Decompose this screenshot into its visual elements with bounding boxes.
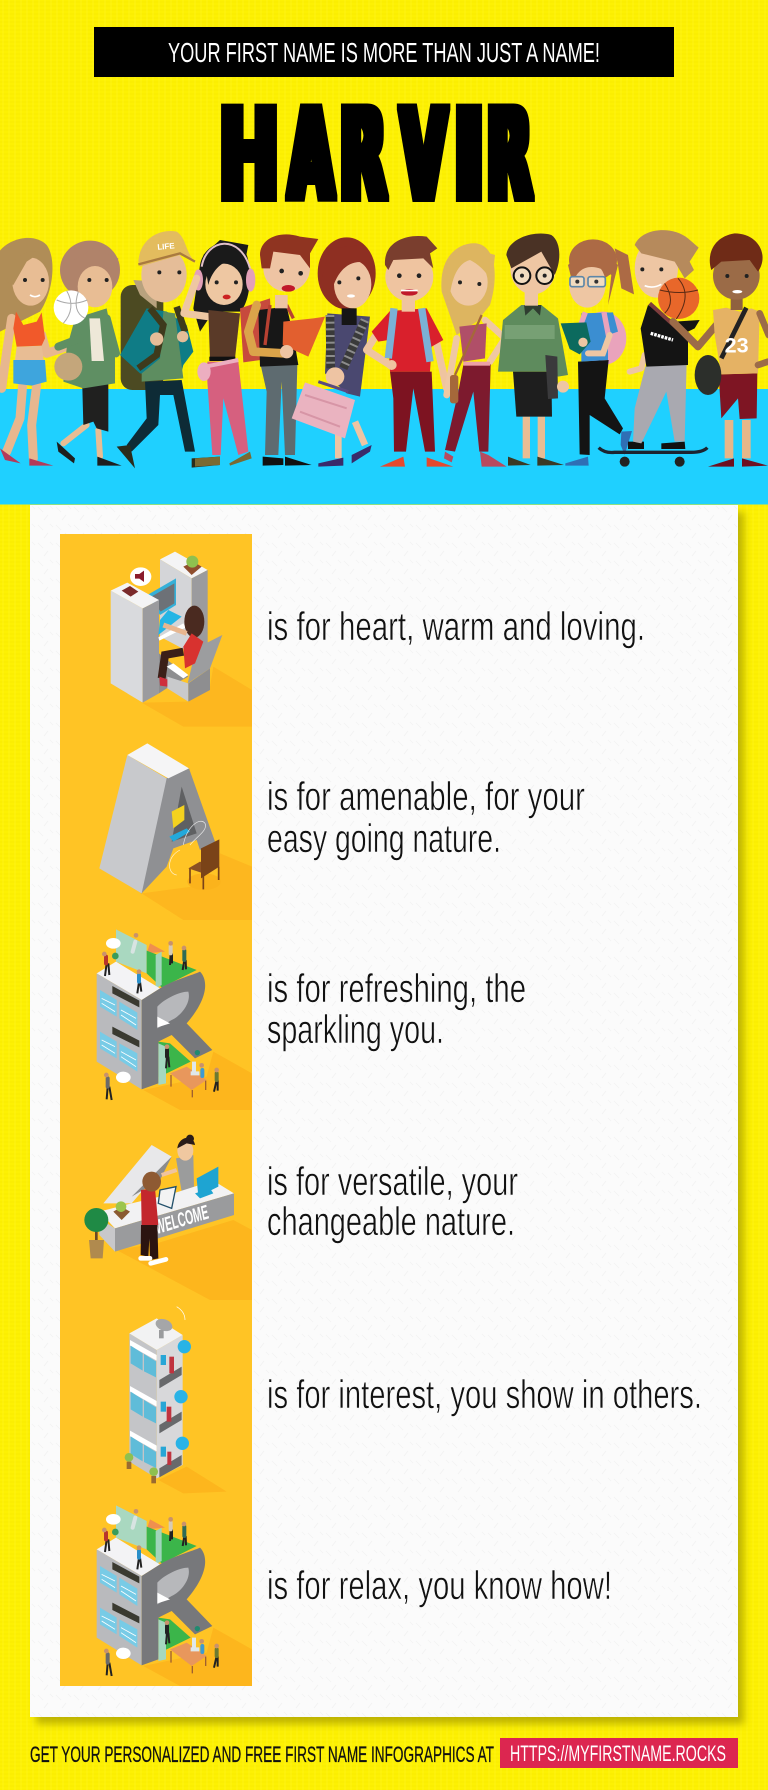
person: girl with pink bag [292,237,376,467]
orange illustration strip [60,534,252,1686]
amenable text [267,775,585,861]
person: boy in number 23 jersey [695,233,768,467]
person: girl with volleyball [54,241,122,466]
versatile text: changeable nature. [267,1200,515,1244]
person: girl with tablet and ponytail [561,239,634,466]
title: name: R [340,80,386,228]
person: hiker with backpack and cap: LIFE [157,241,176,252]
refreshing text [267,967,526,1052]
header banner [94,27,674,77]
people: left group [0,231,255,468]
people illustration [0,230,768,468]
person: boy in red t-shirt [367,236,453,467]
blue floor band [0,389,768,504]
title: name: I [452,80,486,228]
person: boy in number 23 jersey: 23 [725,333,749,357]
title: name: V [401,80,446,228]
title: name: R [487,80,531,228]
versatile text: is for versatile, your [267,1160,518,1204]
amenable text: is for amenable, for your [267,775,585,819]
people: centre group [240,234,507,467]
letter tile: H [111,552,252,727]
title: name [219,80,535,228]
white content panel [30,505,744,1724]
versatile text [267,1160,518,1244]
relax text: is for relax, you know how! [267,1564,612,1608]
amenable text: easy going nature. [267,817,501,861]
letter tile: A [99,743,252,920]
person: boy on skateboard with basketball [599,230,716,467]
letter tile: V welcome desk: WELCOME [152,1202,212,1239]
letter tile: second R [97,1505,252,1686]
title: name: A [289,80,333,228]
footer [30,1738,738,1768]
people: right group [498,230,768,467]
letter tile: R [97,929,252,1110]
person: boy with book [240,234,325,466]
person: girl in orange top [0,238,77,466]
refreshing text: is for refreshing, the [267,967,526,1011]
title: name: H [219,80,279,228]
heart text: is for heart, warm and loving. [267,605,645,649]
letter tile: V welcome desk [84,1135,252,1300]
letter tile: I tower [125,1307,227,1493]
refreshing text: sparkling you. [267,1008,444,1052]
person: girl with headphones [184,240,255,467]
person: boy with glasses and laptop [498,234,569,466]
person: blonde girl with shoulder bag [441,243,507,467]
person: hiker with backpack and cap [117,231,220,468]
